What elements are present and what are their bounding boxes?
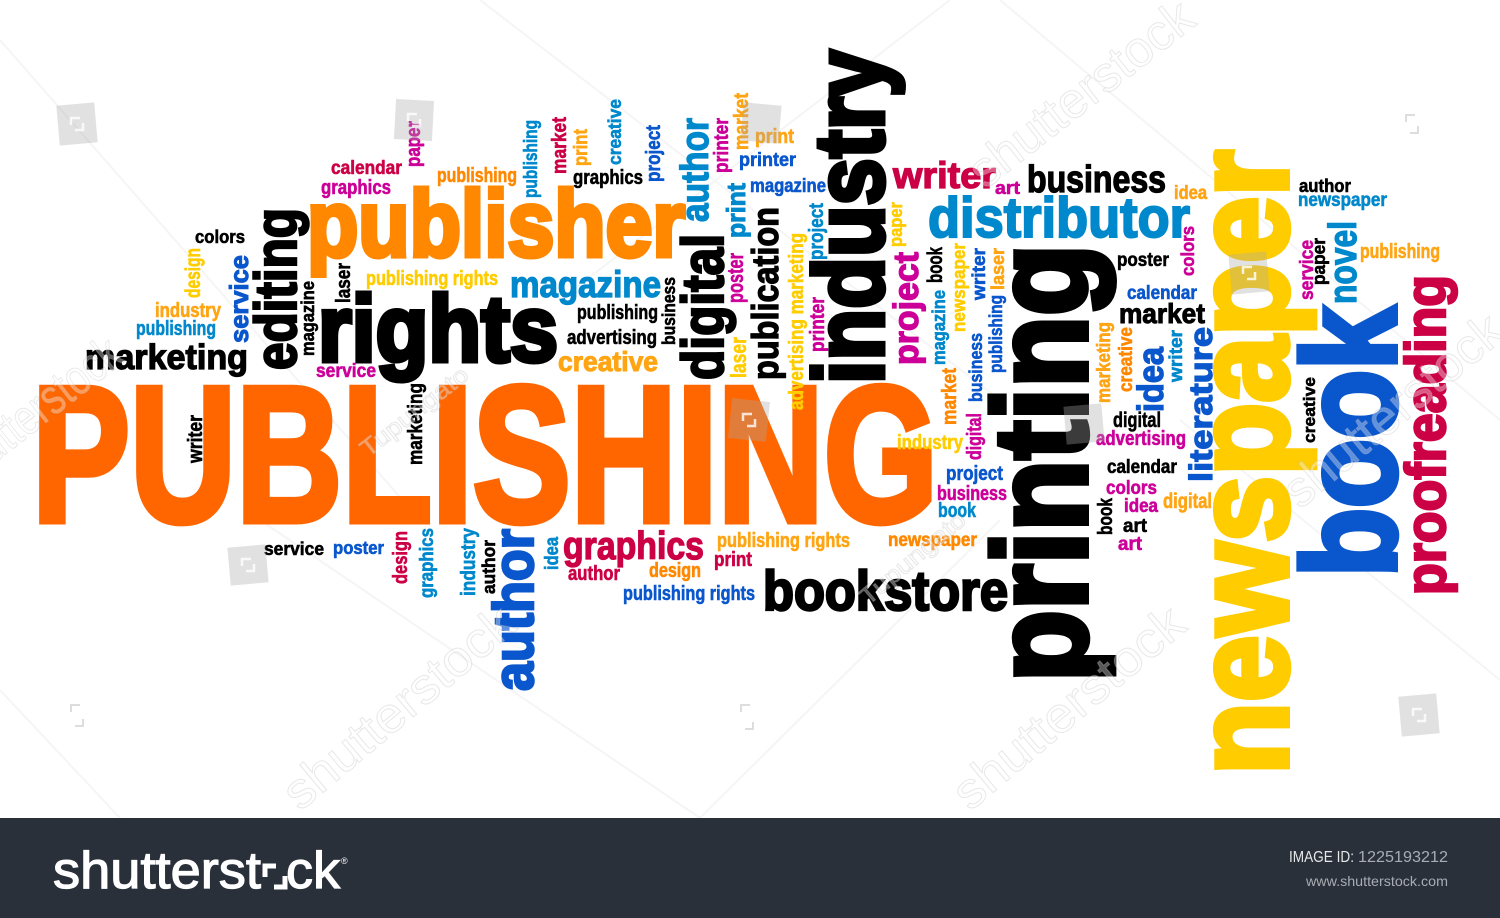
lower-right cluster words: book [1095, 497, 1117, 535]
bottom cluster words: poster [333, 538, 384, 558]
top cluster words: calendar [331, 158, 403, 179]
lower-right cluster words: business [937, 483, 1007, 505]
word: industry: industry [794, 50, 904, 384]
bottom cluster words: graphics [417, 528, 438, 598]
left cluster words: writer [185, 415, 207, 464]
right-centre cluster words: literature [1183, 327, 1219, 482]
bottom cluster words: industry [458, 527, 480, 596]
left cluster words: publishing [136, 318, 216, 340]
lower-right cluster words: project [946, 463, 1003, 485]
top cluster words: market [731, 93, 753, 150]
word: editing: editing [244, 208, 309, 370]
right-centre cluster words: market [1119, 298, 1205, 329]
word: author (lower): author [482, 529, 546, 691]
top cluster words: magazine [750, 176, 826, 197]
far-right cluster words: novel [1322, 221, 1365, 304]
left cluster words: magazine [298, 281, 318, 356]
watermark overlay: shutterstock [941, 594, 1196, 820]
centre cluster words: project [806, 203, 828, 260]
far-right cluster words: creative [1300, 377, 1319, 443]
lower-right cluster words: book [938, 500, 977, 522]
top cluster words: project [643, 125, 665, 182]
far-right cluster words: author [1299, 176, 1351, 196]
left cluster words: design [182, 248, 205, 298]
right-centre cluster words: paper [886, 202, 906, 247]
footer bar [0, 818, 1500, 918]
logo: shutterstock: o [263, 887, 264, 889]
bottom cluster words: publishing rights [623, 583, 755, 605]
top cluster words: creative [605, 99, 625, 165]
bottom cluster words: idea [542, 537, 563, 570]
lower-right cluster words: advertising [1096, 428, 1186, 450]
top cluster words: print [571, 128, 592, 166]
top cluster words: print [755, 126, 794, 148]
left cluster words: colors [195, 227, 245, 247]
right-centre cluster words: creative [1116, 327, 1137, 392]
lower-right cluster words [888, 409, 1212, 555]
word cloud [32, 50, 1458, 775]
centre cluster words: printer [807, 297, 829, 352]
left cluster words: industry [155, 300, 222, 322]
bottom cluster words: print [714, 549, 752, 571]
lower-right cluster words: digital [1113, 409, 1161, 432]
centre cluster words: print [721, 183, 751, 238]
centre cluster words: advertising marketing [786, 233, 808, 410]
bottom cluster words: design [649, 560, 701, 582]
word: publisher: publisher [307, 171, 685, 276]
lower-right cluster words: colors [1106, 478, 1157, 499]
right-centre cluster words: business [1027, 159, 1166, 201]
watermark overlay: Tupungato [855, 506, 971, 611]
top cluster words: market [549, 117, 571, 174]
right-centre cluster words: project [887, 252, 926, 365]
logo: shutterstock: shutterst [53, 842, 262, 900]
centre cluster words: laser [726, 337, 751, 378]
right-centre cluster words: writer [892, 155, 996, 196]
left cluster words: service [224, 255, 254, 343]
word: book: book [1276, 307, 1423, 577]
right-centre cluster words: market [939, 368, 961, 425]
far-right cluster words: paper [1309, 238, 1329, 285]
far-right cluster words: service [1297, 240, 1318, 300]
word: PUBLISHING: PUBLISHING [32, 346, 938, 562]
right-centre cluster words: idea [1174, 183, 1207, 204]
right-centre cluster words: laser [988, 248, 1008, 290]
lower-right cluster words: calendar [1107, 457, 1178, 478]
top cluster words: paper [403, 121, 425, 167]
right-centre cluster words: art [995, 178, 1020, 198]
bottom cluster words: author [568, 563, 620, 585]
top cluster words: printer [739, 150, 797, 171]
right-centre cluster words: magazine [929, 290, 949, 365]
left cluster words: marketing [85, 338, 248, 377]
centre cluster words: publication [745, 207, 786, 380]
lower-right cluster words: art [1118, 534, 1143, 555]
right-centre cluster words: digital [964, 413, 986, 460]
top cluster words: graphics [321, 177, 391, 199]
lower-right cluster words: newspaper [888, 530, 978, 551]
centre cluster words [366, 183, 829, 410]
right-centre cluster words: book [924, 247, 947, 283]
right-centre cluster words: writer [969, 248, 989, 301]
word: newspaper: newspaper [1168, 150, 1315, 775]
word: proofreading: proofreading [1394, 275, 1458, 595]
word: printing: printing [967, 244, 1114, 682]
top cluster words: author [674, 118, 717, 222]
lower-right cluster words: digital [1163, 490, 1212, 513]
top cluster words: publishing [521, 120, 542, 198]
image id: 1225193212 [1358, 849, 1448, 866]
bottom cluster words: publishing rights [717, 530, 850, 552]
right-centre cluster words: calendar [1127, 283, 1198, 304]
word: bookstore: bookstore [763, 559, 1008, 622]
centre cluster words: poster [723, 253, 748, 303]
right-centre cluster words: marketing [1094, 322, 1115, 403]
right-centre cluster words: idea [1130, 346, 1171, 412]
top cluster words [321, 93, 826, 222]
right-centre cluster words: colors [1178, 226, 1198, 276]
far-right cluster words [1297, 176, 1440, 443]
centre cluster words: advertising [567, 327, 657, 349]
left cluster words [85, 227, 427, 465]
logo: shutterstock [53, 842, 348, 900]
bottom cluster words: author [479, 540, 499, 594]
watermark overlay: shutterstock [271, 594, 526, 820]
bottom cluster words: design [390, 531, 412, 584]
lower-right cluster words: art [1123, 516, 1148, 537]
top cluster words: printer [711, 118, 733, 173]
word: distributor: distributor [928, 186, 1190, 250]
image id: IMAGE ID: [1289, 849, 1354, 866]
top cluster words: graphics [573, 167, 643, 189]
right-centre cluster words: publishing [986, 295, 1006, 373]
lower-right cluster words: industry [897, 432, 964, 454]
top cluster words: publishing [437, 165, 517, 187]
centre cluster words: business [659, 277, 679, 345]
bottom cluster words [264, 525, 850, 605]
far-right cluster words: newspaper [1298, 190, 1388, 211]
logo: shutterstock: ® [341, 856, 348, 866]
centre cluster words: creative [558, 346, 658, 377]
left cluster words: service [316, 361, 376, 382]
far-right cluster words: publishing [1360, 241, 1440, 263]
right-centre cluster words: newspaper [949, 243, 969, 332]
word: rights: rights [318, 276, 558, 381]
centre cluster words: publishing rights [366, 268, 498, 290]
centre cluster words: publishing [577, 302, 658, 324]
right-centre cluster words [886, 155, 1219, 482]
right-centre cluster words: writer [1166, 330, 1186, 383]
watermark overlay: Tupungato [355, 361, 474, 463]
right-centre cluster words: business [966, 333, 986, 402]
logo: shutterstock: ck [286, 842, 341, 900]
bottom cluster words: graphics [563, 525, 704, 568]
bottom cluster words: service [264, 539, 324, 559]
left cluster words: marketing [405, 383, 427, 465]
image id [1289, 849, 1448, 866]
right-centre cluster words: poster [1117, 250, 1170, 271]
word: digital: digital [671, 234, 736, 380]
website url: www.shutterstock.com [1305, 873, 1448, 889]
centre cluster words: magazine [510, 264, 661, 305]
left cluster words: laser [333, 263, 355, 303]
lower-right cluster words: idea [1124, 496, 1158, 517]
